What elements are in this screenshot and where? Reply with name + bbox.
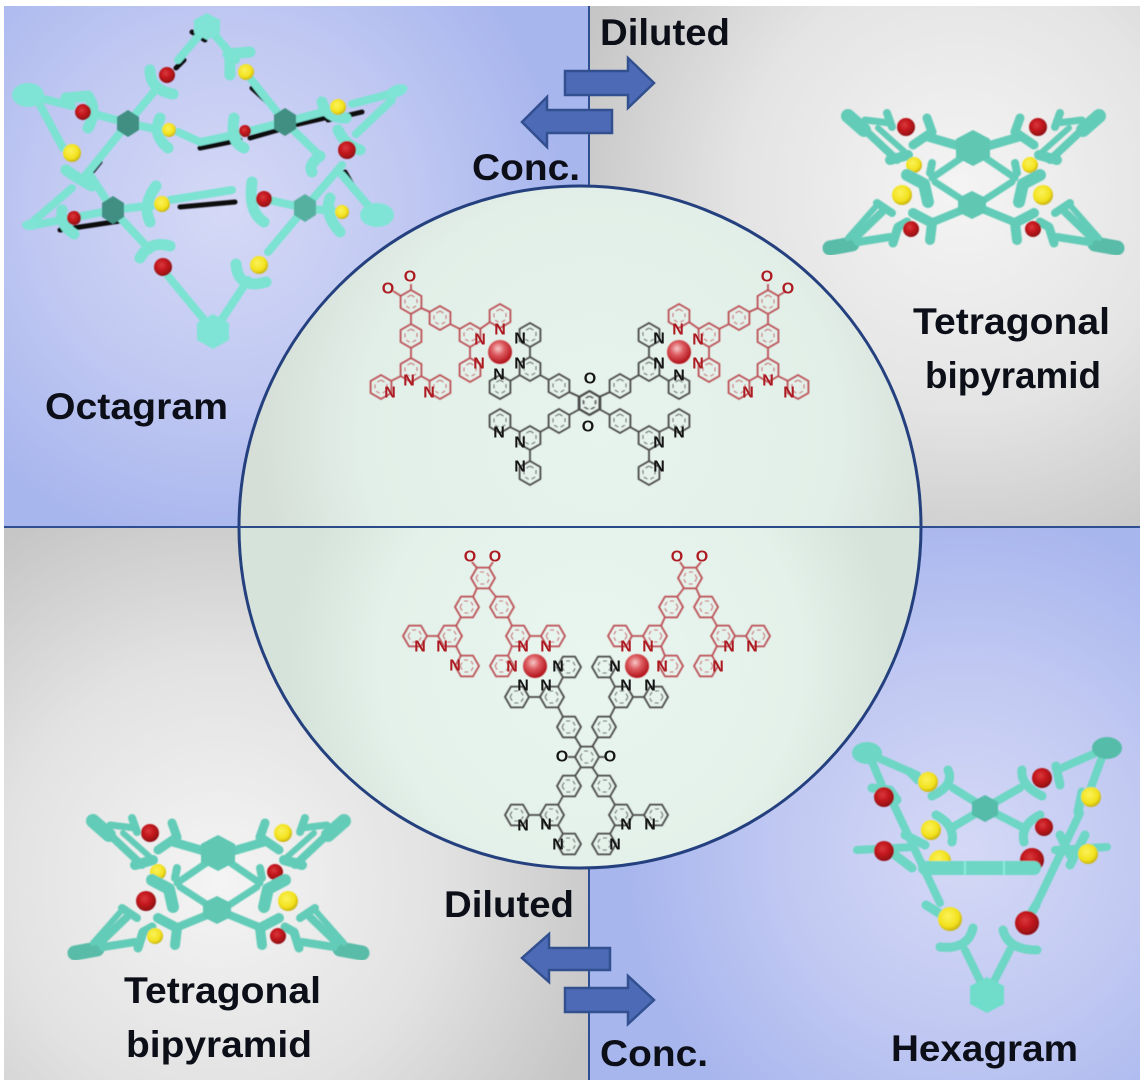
structure: tetragonal bipyramid, bottom left: [75, 818, 362, 953]
molecule labels: lower complex: N: [746, 638, 758, 656]
molecule labels: upper complex: N: [762, 372, 774, 390]
molecule labels: lower complex: N: [517, 818, 529, 834]
molecule labels: lower complex: N: [723, 638, 735, 656]
label: Tetragonal bipyramid, top right: Tetragonal: [913, 301, 1110, 342]
molecule labels: lower complex: O: [671, 548, 683, 566]
molecule labels: upper complex: N: [494, 322, 506, 338]
label: Tetragonal bipyramid, bottom left: bipyramid: [126, 1024, 312, 1065]
molecule labels: upper complex: N: [514, 458, 526, 476]
molecule labels: upper complex: O: [404, 268, 416, 286]
label: Conc., bottom: Conc.: [600, 1033, 708, 1074]
molecule labels: upper complex: N: [742, 384, 754, 402]
label: Diluted, bottom: Diluted: [444, 884, 574, 925]
molecule labels: lower complex: N: [540, 678, 552, 694]
panel: hexagram quadrant: [589, 527, 1140, 1080]
molecule labels: lower complex: N: [436, 638, 448, 656]
molecule labels: upper complex: O: [584, 370, 596, 388]
molecule labels: lower complex: N: [644, 678, 656, 694]
molecule labels: lower complex: N: [506, 658, 518, 676]
molecule labels: lower complex: O: [604, 748, 616, 766]
molecule labels: upper complex: N: [672, 322, 684, 338]
molecule labels: lower complex: N: [540, 638, 552, 656]
panel: octagram quadrant: [4, 6, 589, 527]
molecule labels: upper complex: O: [761, 268, 773, 286]
molecule labels: upper complex: N: [423, 384, 435, 402]
molecule labels: upper complex: N: [514, 356, 526, 372]
molecule labels: upper complex: N: [673, 368, 685, 384]
molecule labels: lower complex: N: [712, 658, 724, 676]
molecule labels: lower complex: [414, 548, 758, 854]
label: Octagram: Octagram: [45, 386, 228, 427]
arrow: concentrated, bottom right: [565, 976, 654, 1024]
molecule labels: upper complex: N: [493, 424, 505, 442]
label: Conc., top: Conc.: [472, 147, 580, 188]
molecule labels: upper complex: N: [403, 372, 415, 390]
molecule labels: lower complex: O: [696, 548, 708, 566]
molecule labels: lower complex: N: [517, 678, 529, 694]
molecule labels: lower complex: N: [609, 658, 621, 676]
molecule labels: lower complex: N: [642, 638, 654, 656]
molecule labels: upper complex: N: [514, 330, 526, 348]
molecule labels: upper complex: N: [692, 332, 704, 348]
molecule labels: lower complex: N: [644, 816, 656, 834]
molecule labels: upper complex: N: [692, 356, 704, 372]
label: Tetragonal bipyramid, top right: bipyramid: [925, 355, 1101, 396]
molecule labels: lower complex: N: [540, 816, 552, 834]
label: Diluted, top: Diluted: [600, 12, 730, 53]
structure: octagram: [12, 13, 409, 349]
molecule labels: lower complex: O: [464, 548, 476, 566]
molecule labels: lower complex: N: [609, 836, 621, 854]
structure: tetragonal bipyramid, top right: [830, 113, 1117, 248]
central disc: [239, 186, 921, 868]
molecule labels: lower complex: N: [414, 638, 426, 656]
molecule labels: upper complex: O: [782, 280, 794, 298]
panel: tetragonal bipyramid quadrant, top right: [589, 6, 1140, 527]
molecule: upper coordination complex: [371, 284, 808, 485]
molecule labels: lower complex: N: [620, 638, 632, 656]
molecule labels: upper complex: N: [783, 384, 795, 402]
molecule labels: lower complex: N: [449, 658, 461, 674]
molecule labels: upper complex: N: [653, 458, 665, 476]
molecule labels: upper complex: N: [673, 424, 685, 442]
structure: hexagram: [852, 737, 1122, 1013]
label: Tetragonal bipyramid, bottom left: Tetragonal: [124, 970, 321, 1011]
molecule labels: upper complex: N: [653, 330, 665, 348]
molecule labels: upper complex: N: [514, 434, 526, 452]
molecule labels: lower complex: O: [489, 548, 501, 566]
arrow: diluted, top right: [565, 58, 654, 108]
molecule labels: lower complex: O: [556, 748, 568, 766]
arrow: diluted, bottom left: [522, 934, 610, 982]
molecule labels: upper complex: N: [653, 434, 665, 452]
molecule labels: lower complex: N: [656, 658, 668, 676]
molecule labels: upper complex: N: [493, 366, 505, 384]
molecule: lower coordination complex: [403, 562, 770, 854]
molecule labels: lower complex: N: [620, 678, 632, 694]
molecule labels: lower complex: N: [517, 638, 529, 656]
molecule labels: upper complex: N: [473, 356, 485, 372]
molecule labels: upper complex: N: [474, 332, 486, 348]
panel: tetragonal bipyramid quadrant, bottom left: [4, 527, 589, 1080]
molecule labels: upper complex: N: [384, 384, 396, 402]
label: Hexagram: Hexagram: [891, 1028, 1078, 1069]
molecule labels: lower complex: N: [552, 658, 564, 676]
molecule labels: lower complex: N: [620, 816, 632, 834]
molecule labels: upper complex: N: [653, 356, 665, 372]
molecule labels: upper complex: O: [582, 418, 594, 436]
molecule labels: upper complex: O: [382, 280, 394, 298]
molecule labels: upper complex: [382, 268, 795, 476]
arrow: concentrated, top left: [522, 97, 612, 147]
molecule labels: lower complex: N: [552, 836, 564, 854]
